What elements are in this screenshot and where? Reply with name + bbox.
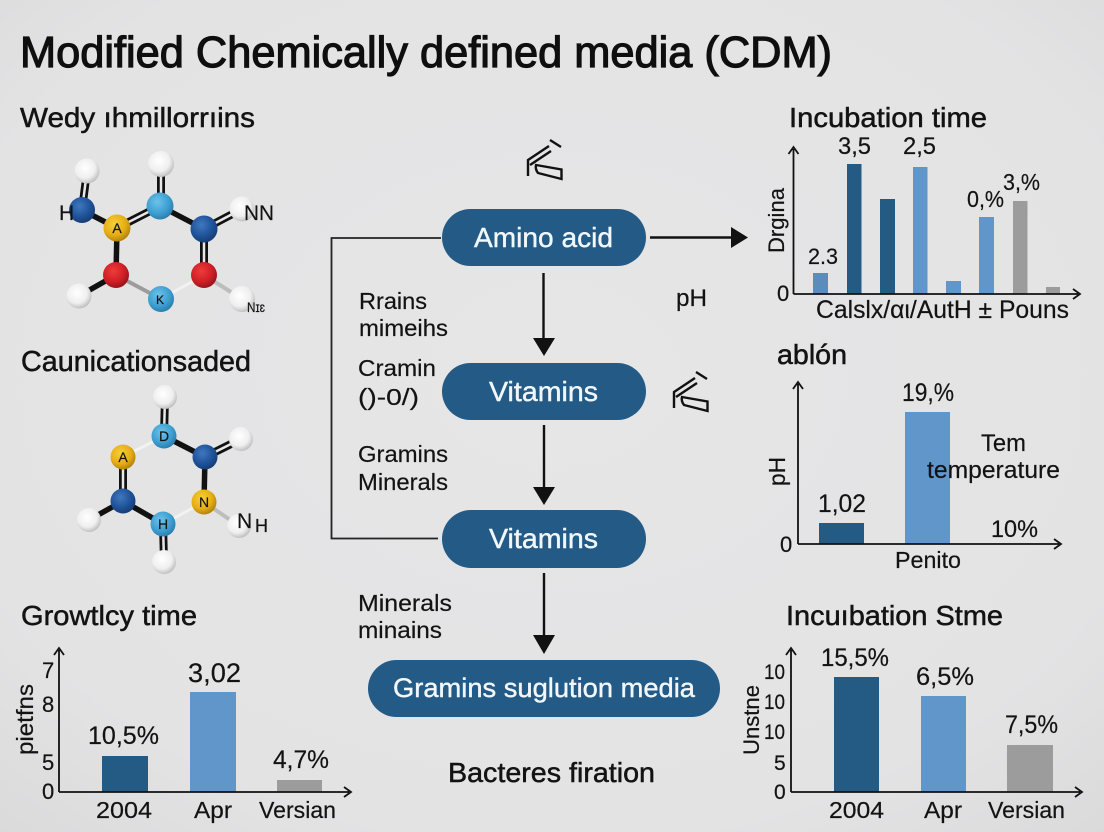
panel: incubation stme chart [739,600,1082,823]
axis labels and values: Apr [924,797,962,823]
molecule diagram: second structure: H [255,516,268,536]
axis labels and values: 3,02 [188,658,241,688]
axis labels and values: 1,02 [818,490,866,518]
axis labels and values: 2.3 [808,244,838,269]
icon: lab pipette right [674,372,708,411]
axis labels and values: Versian [259,797,336,823]
flow node: solution media: Gramins suglution media [393,673,696,703]
molecule diagram: first structure: A [112,220,122,236]
arrow: amino acid to vitamins [533,273,555,356]
feedback bracket line [332,238,441,538]
arrow: vitamins to media [533,573,555,654]
axis labels and values: 2004 [96,797,152,823]
flow node: vitamins two [442,510,646,568]
axis labels and values: pietfns [12,684,38,755]
flow side labels: minains [358,617,442,643]
axis labels and values: 3,% [1003,169,1040,195]
bars [102,692,322,792]
axis labels and values: 0 [774,781,786,804]
bars [819,412,950,544]
molecule diagram: first structure: Nɪɛ [247,299,265,315]
molecule diagram: second structure: H [158,516,168,532]
axis labels and values: 0,% [967,186,1004,212]
molecule diagram: first structure [59,151,274,315]
panel: second molecule [21,346,268,574]
axis labels and values: 10 [764,691,785,714]
axis labels and values: Apr [194,797,232,823]
caption: bacteria fixation: Bacteres firation [448,757,655,788]
icon: lab pipette top [528,140,562,179]
axis labels and values: 2004 [829,797,884,823]
axis labels and values [764,379,1060,573]
axis labels and values: 0 [777,281,789,306]
axis labels and values: 6,5% [916,663,974,691]
axis labels and values: 5 [774,752,786,775]
axis labels and values: 10% [991,516,1038,543]
bars [813,164,1060,294]
heading: first molecule: Wedy ıhmillorrıins [20,102,255,133]
flow side labels [358,285,707,643]
axis labels and values: Drgina [764,187,789,253]
axis labels and values: Versian [988,797,1065,823]
molecule diagram: second structure: N [237,510,252,533]
axis labels and values: Calslx/αι/AutH ± Pouns [816,296,1069,324]
axis labels and values: 19,% [902,379,954,407]
flow side labels: mimeihs [359,315,448,341]
axis labels and values: 0 [780,532,792,557]
flow node: vitamins one [442,363,646,420]
axis labels and values: 8 [42,692,54,717]
axes [788,147,1080,299]
molecule diagram: second structure: D [159,428,169,444]
molecule diagram: second structure [77,385,268,574]
axis labels and values: 10 [764,661,785,684]
flow side labels: ()-0/) [358,384,419,410]
flow side labels: Cramin [358,355,436,381]
flow side labels: Rrains [359,288,427,314]
axis labels and values [739,644,1065,823]
flow node: solution media [368,660,720,717]
molecule diagram: second structure: A [118,449,128,465]
axis labels and values: pH [764,457,790,486]
flow node: vitamins one: Vitamins [489,376,598,407]
axis labels and values [12,658,336,823]
panel: growth time chart [12,600,351,823]
flow node: amino acid [442,209,646,266]
panel: incubation time chart [764,102,1080,324]
axes [786,648,1082,797]
panel: first molecule [20,102,274,315]
molecule diagram: first structure: K [156,293,164,307]
axis labels and values [764,133,1069,324]
molecule diagram: first structure: H [59,202,74,225]
axis labels and values: 2,5 [903,133,936,160]
flow side labels: Gramins [358,441,448,467]
axes [793,382,1061,549]
flow side labels: Minerals [358,590,452,616]
heading: incubation time: Incubation time [789,102,987,133]
panel: pH temperature chart [764,339,1061,573]
axis labels and values: 5 [42,750,54,775]
axis labels and values: 10,5% [88,722,159,750]
axis labels and values: 15,5% [821,644,889,672]
molecule diagram: second structure: N [199,494,209,510]
arrow: vitamins to vitamins [533,425,555,505]
axis labels and values: Tem [981,430,1026,457]
axis labels and values: Penito [895,547,961,573]
axes [54,648,351,797]
axis labels and values: Unstne [739,685,764,755]
axis labels and values: 7 [42,658,54,683]
heading: incubation stme: Incuıbation Stme [786,600,1003,631]
axis labels and values: 4,7% [273,746,329,774]
flow side labels: pH [676,285,707,312]
axis labels and values: 10 [764,721,785,744]
axis labels and values: 0 [42,779,54,804]
flow side labels: Minerals [358,469,448,495]
axis labels and values: 7,5% [1005,711,1058,739]
axis labels and values: 3,5 [838,133,871,160]
heading: growth time: Growtlcy time [21,600,197,631]
arrow: amino acid to chart [650,227,748,248]
flow node: amino acid: Amino acid [474,222,613,253]
molecule diagram: first structure: NN [244,202,274,225]
heading: second molecule: Caunicationsaded [21,346,251,378]
heading: pH chart: ablón [777,339,847,370]
flow node: vitamins two: Vitamins [489,523,598,554]
title: Modified Chemically defined media (CDM) [20,28,832,77]
bars [834,677,1053,792]
axis labels and values: temperature [927,457,1060,484]
